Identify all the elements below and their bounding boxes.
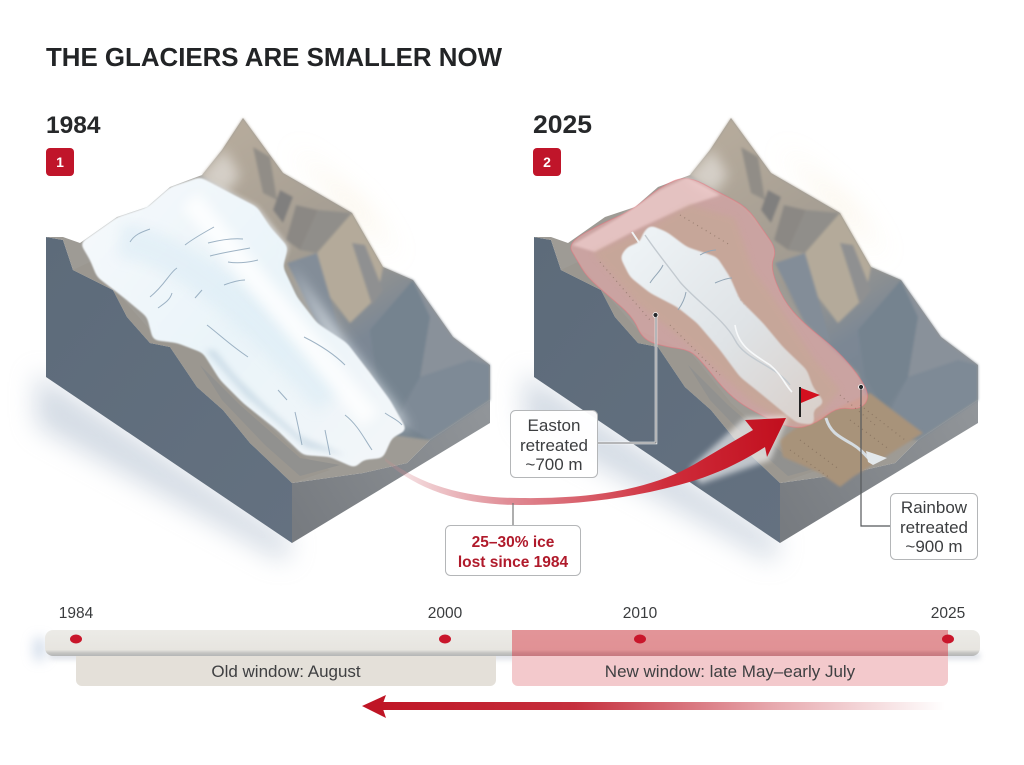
badge 2: 2 [543,154,551,170]
debris speckles [600,215,905,478]
callout leader: ice lost [512,503,514,525]
old window [76,656,496,686]
glacier ice [80,177,407,468]
timeline bar [45,630,980,656]
meltwater stream [826,418,887,465]
callout leader: Rainbow [861,389,890,526]
callout: Rainbow retreated: retreated [900,518,968,537]
heading: 2025: 2025 [533,111,592,139]
callout: Easton retreated: retreated [520,436,588,455]
badge 2 [533,148,561,176]
callout: ice lost: 25–30% ice [472,534,555,551]
badge 1: 1 [56,154,64,170]
callout: ice lost [446,526,580,576]
timeline year labels: 1984 [59,605,94,622]
timeline [34,605,980,686]
arrow: loss from 1984 to 2025 [385,416,788,505]
timeline year labels: 2000 [428,605,463,622]
callout: Rainbow retreated: ~900 m [905,537,963,556]
mist on right of glacier [290,265,410,430]
exposed moraine [593,205,840,425]
badge 1 [46,148,74,176]
pale upper band [572,177,720,252]
timeline year labels [59,605,965,622]
callout leader: Easton [598,317,656,443]
timeline year labels: 2010 [623,605,658,622]
debris floor [780,393,923,487]
crevasses [130,227,402,455]
arrow: season shift earlier [362,695,945,718]
glacier remaining [620,225,825,425]
timeline markers [70,634,954,644]
heading: 1984: 1984 [46,112,101,139]
marker dots [653,312,864,390]
soft shadows [36,145,888,562]
callout: Easton retreated: Easton [528,416,580,435]
callout: Easton retreated [510,410,598,478]
panel: 1984 glacier block [46,118,490,543]
glacier crevasses and melt channel [632,232,792,392]
callout: Rainbow retreated: Rainbow [901,498,968,517]
callout: Rainbow retreated [890,494,978,560]
timeline year labels: 2025 [931,605,965,622]
panel: 2025 glacier block [534,118,978,543]
icon: red flag [799,387,820,417]
title: THE GLACIERS ARE SMALLER NOW [46,42,502,72]
old glacier extent [571,179,868,427]
callout: Easton retreated: ~700 m [525,455,583,474]
callout: ice lost: lost since 1984 [458,554,569,571]
new window [512,630,948,686]
glacier shading [120,200,370,455]
new window: New window: late May–early July [605,662,856,681]
old window: Old window: August [211,662,361,681]
